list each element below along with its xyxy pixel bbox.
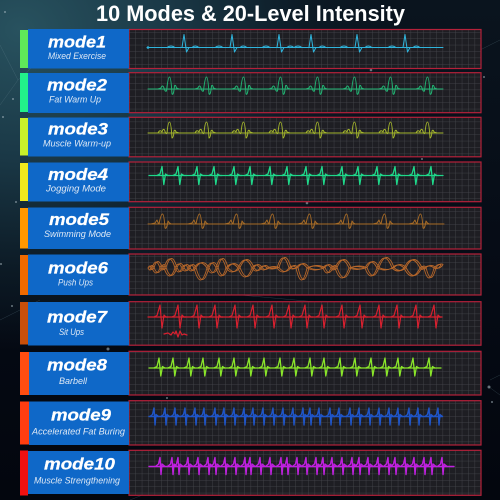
mode9 name: mode9: [51, 406, 112, 425]
mode5 description: Swimming Mode: [44, 229, 111, 239]
mode2 name: mode2: [47, 76, 108, 95]
mode7 small noise trace: [164, 331, 187, 337]
mode10 label box: [28, 451, 129, 494]
title: 10 Modes & 20-Level Intensity: [96, 1, 406, 26]
mode9 waveform: [149, 408, 442, 425]
mode2 label box: [28, 73, 129, 113]
mode10 description: Muscle Strengthening: [34, 475, 120, 485]
mode6 name: mode6: [48, 258, 109, 277]
mode4 label box: [28, 162, 129, 202]
mode8 label box: [29, 352, 129, 395]
mode6 waveform: [148, 258, 443, 280]
panel: mode3: [20, 117, 481, 157]
mode10 intensity bar: [20, 450, 28, 496]
mode4 intensity bar: [20, 163, 28, 201]
mode8 intensity bar: [20, 352, 29, 395]
panel: mode9: [20, 401, 481, 445]
mode7 name: mode7: [47, 307, 109, 326]
mode2 description: Fat Warm Up: [49, 95, 101, 105]
mode7 waveform: [148, 305, 442, 337]
mode5 waveform: [148, 214, 444, 228]
mode4 waveform: [149, 166, 443, 184]
mode4 name: mode4: [48, 165, 109, 184]
mode5 intensity bar: [20, 208, 28, 248]
mode9 intensity bar: [20, 402, 29, 444]
mode1 waveform: [147, 34, 443, 52]
mode5 name: mode5: [49, 210, 110, 229]
panel: mode7: [20, 302, 481, 346]
mode6 description: Push Ups: [58, 277, 93, 287]
mode3 description: Muscle Warm-up: [43, 139, 111, 149]
mode10 waveform: [149, 458, 454, 474]
panel: mode10: [20, 450, 481, 496]
mode10 name: mode10: [44, 454, 116, 473]
mode2 intensity bar: [20, 73, 28, 112]
panel: mode2: [20, 73, 481, 113]
panel: mode1: [20, 29, 481, 68]
background dots: [0, 11, 493, 403]
mode7 label box: [28, 302, 129, 346]
mode7 description: Sit Ups: [59, 327, 84, 337]
panel: mode8: [20, 351, 481, 395]
panel: mode6: [20, 254, 481, 295]
mode2 waveform: [148, 77, 443, 94]
mode1 label box: [28, 29, 129, 68]
mode9 description: Accelerated Fat Buring: [31, 426, 125, 436]
mode6 intensity bar: [20, 255, 28, 295]
mode3 label box: [28, 118, 129, 156]
mode8 name: mode8: [47, 356, 108, 375]
mode1 description: Mixed Exercise: [48, 51, 106, 61]
mode4 description: Jogging Mode: [45, 183, 106, 193]
mode9 label box: [29, 402, 129, 445]
mode1 name: mode1: [48, 32, 106, 52]
mode5 label box: [28, 208, 129, 249]
mode3 intensity bar: [20, 118, 28, 156]
mode3 name: mode3: [48, 119, 109, 138]
mode8 waveform: [149, 358, 441, 376]
mode8 description: Barbell: [59, 376, 88, 386]
mode1 intensity bar: [20, 30, 28, 68]
mode6 label box: [28, 254, 129, 295]
panel: mode5: [20, 207, 481, 249]
mode3 waveform: [148, 122, 443, 138]
panel: mode4: [20, 162, 481, 202]
mode7 intensity bar: [20, 302, 28, 344]
